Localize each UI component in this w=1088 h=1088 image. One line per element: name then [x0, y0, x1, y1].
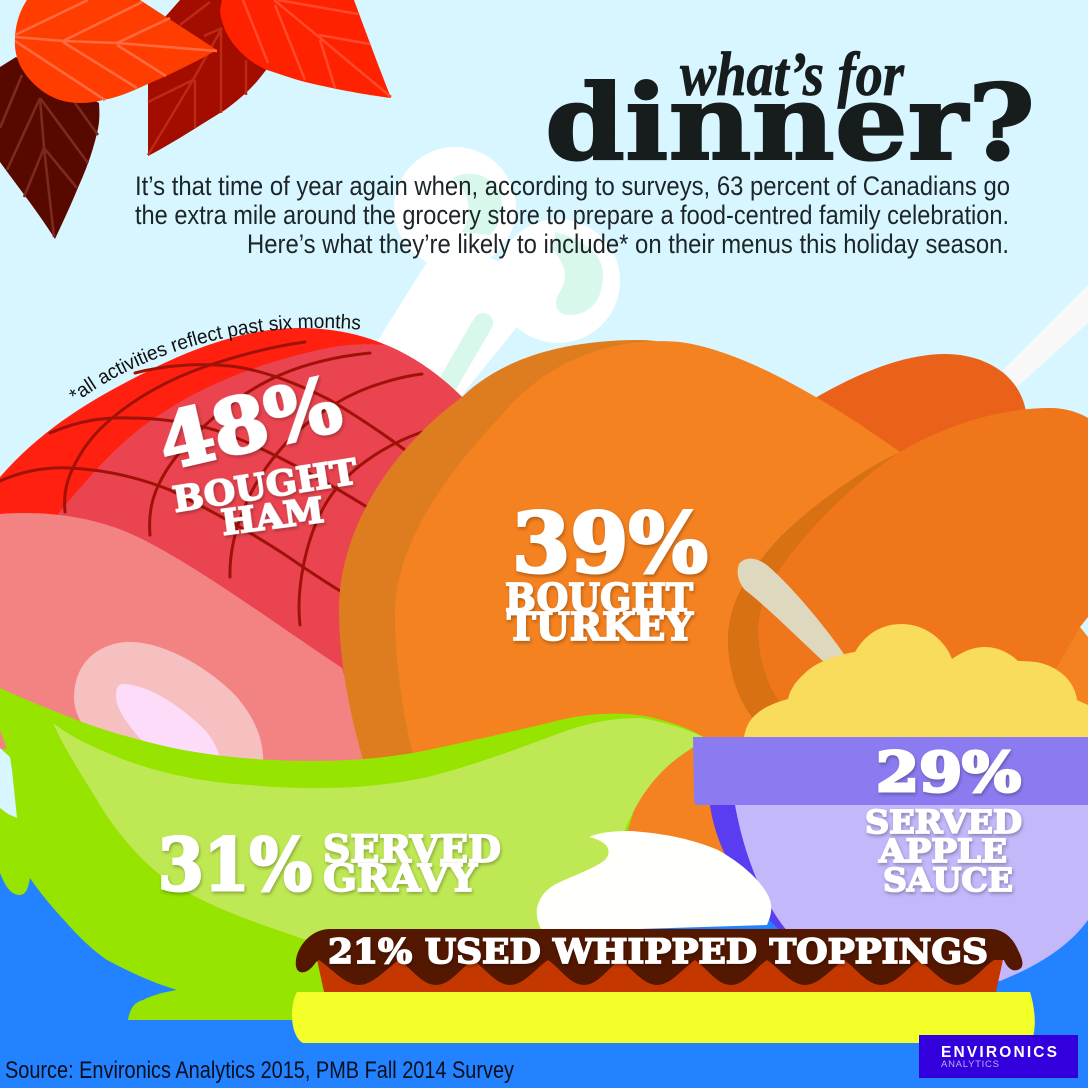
logo: Environics Analytics [919, 1035, 1078, 1078]
ham bone centre [116, 684, 222, 770]
intro text: Here’s what they’re likely to include* on their menus this holiday season. [247, 229, 1009, 259]
gravy boat inner [53, 718, 705, 950]
ham [0, 328, 480, 790]
footnote curved text: *all activities reflect past six months [69, 314, 360, 397]
intro text [135, 171, 1010, 259]
stat: 31% served gravy: GRAVY [323, 856, 478, 900]
icon: bright red leaf [220, 0, 391, 98]
logo: Environics Analytics: ANALYTICS [941, 1059, 999, 1070]
stat: 48% bought ham: HAM [219, 490, 326, 544]
gravy boat outer [0, 688, 705, 1020]
apple sauce bowl [693, 737, 1088, 981]
gravy boat handle hole [0, 748, 17, 818]
stat: 39% bought turkey: BOUGHT [505, 575, 693, 620]
bowl dark side [710, 805, 830, 960]
stat: 39% bought turkey [505, 496, 708, 649]
ham cut face [0, 513, 380, 790]
stat: 31% served gravy: SERVED [323, 827, 501, 871]
ham outer crust [0, 328, 462, 620]
icon: orange leaf [15, 0, 217, 103]
leaves [0, 0, 391, 239]
bowl body [735, 805, 1088, 981]
icon: turkey bone [375, 147, 620, 400]
stat: 29% served apple sauce: 29% [876, 740, 1021, 804]
stat: 21% used whipped toppings: 21% USED WHIPPED TOPPINGS [328, 932, 988, 972]
turkey leg shadow [728, 453, 950, 720]
stat: 29% served apple sauce [865, 740, 1022, 899]
turkey body shadow edge [339, 340, 900, 860]
stat: 29% served apple sauce: SAUCE [883, 861, 1013, 899]
icon: dark red leaf [148, 0, 266, 156]
gravy boat handle gap [0, 730, 7, 749]
stat: 29% served apple sauce: SERVED [865, 803, 1022, 841]
icon: dark leaf [0, 57, 99, 239]
bowl rim [693, 737, 1088, 805]
source line: Source: Environics Analytics 2015, PMB Fall 2014 Survey [5, 1057, 514, 1084]
gravy boat [0, 688, 705, 1020]
whipped topping dollop [537, 831, 771, 932]
turkey leg [758, 408, 1088, 730]
stat: 48% bought ham: BOUGHT [170, 451, 360, 521]
ham face inner ring [74, 642, 263, 770]
turkey [339, 340, 1088, 860]
pie filling [316, 955, 1004, 992]
icon: serving spoon [738, 559, 844, 662]
pumpkin pie [292, 929, 1035, 1043]
pie crust [292, 992, 1035, 1043]
stat: 39% bought turkey: 39% [512, 496, 708, 592]
stat: 48% bought ham [150, 359, 360, 544]
logo: Environics Analytics: ENVIRONICS [941, 1044, 1057, 1061]
ham score lines [0, 342, 422, 625]
stat: 48% bought ham: 48% [150, 359, 349, 488]
pie chocolate topping [296, 929, 1022, 985]
turkey body [395, 341, 1088, 860]
background table [0, 820, 1088, 1088]
title: what's for: what’s for [680, 41, 905, 109]
stat: 39% bought turkey: TURKEY [507, 604, 694, 649]
icon: mashed apple sauce [744, 624, 1088, 738]
stat: 31% served gravy: 31% [158, 822, 312, 907]
title [545, 41, 1035, 184]
title: dinner?: dinner? [545, 61, 1035, 184]
icon: second bone [1003, 285, 1088, 387]
stat: 31% served gravy [158, 822, 501, 907]
ham inner skin [58, 344, 462, 676]
icon: back drumstick [815, 354, 1026, 470]
stat: 29% served apple sauce: APPLE [878, 832, 1007, 870]
